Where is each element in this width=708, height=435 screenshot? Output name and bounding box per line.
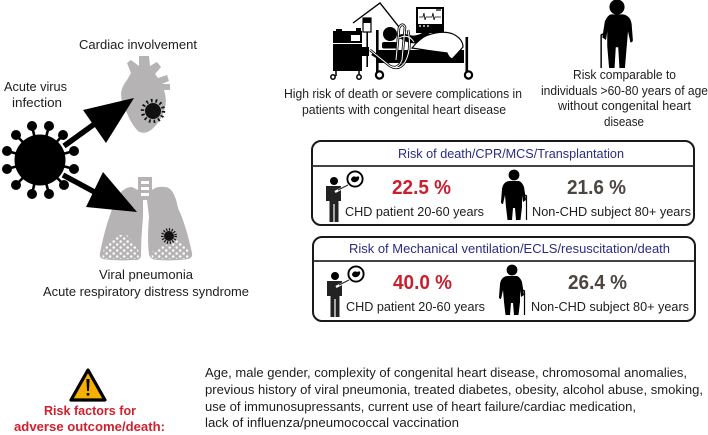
panel: risk of death [312, 141, 694, 225]
text: risk comparable statement: Risk comparable to [573, 68, 676, 82]
heading: risk of mechanical ventilation: Risk of Mechanical ventilation/ECLS/resuscitation/death [349, 241, 670, 256]
heading: risk factors: adverse outcome/death: [14, 419, 165, 434]
bed frame [376, 30, 379, 72]
value: 40.0 percent: 40.0 % [393, 272, 452, 294]
text: high risk statement: High risk of death or severe complications in [284, 87, 522, 101]
panel: risk of mechanical ventilation [313, 237, 695, 321]
text: risk comparable statement: without congenital heart [557, 99, 692, 113]
value: 21.6 percent: 21.6 % [567, 177, 626, 199]
icon: virus [2, 121, 79, 199]
heading: risk of death: Risk of death/CPR/MCS/Transplantation [398, 146, 624, 161]
icon: CHD patient [326, 171, 363, 222]
icon: IV bag and pole [363, 18, 371, 67]
text: risk comparable statement: disease [604, 115, 644, 129]
label: cardiac involvement: Cardiac involvement [79, 38, 198, 52]
icon: warning triangle [71, 370, 105, 400]
label: viral pneumonia and ARDS [43, 268, 249, 299]
label: acute virus infection: infection [12, 96, 62, 110]
icon: ventilator machine [331, 28, 369, 79]
icon: elderly subject [499, 265, 524, 315]
text: risk factor list: lack of influenza/pneumococcal vaccination [205, 416, 459, 430]
heading: risk factors: Risk factors for [44, 403, 136, 418]
icon: patient in hospital bed [331, 3, 472, 79]
label: acute virus infection [4, 80, 67, 110]
text: risk factor list [205, 366, 703, 430]
label: viral pneumonia and ARDS: Acute respiratory distress syndrome [43, 285, 249, 299]
value: 26.4 percent: 26.4 % [568, 272, 627, 294]
value: 22.5 percent: 22.5 % [392, 177, 451, 199]
label: non-CHD subject: Non-CHD subject 80+ years [531, 300, 689, 314]
patient [383, 27, 397, 41]
arrow: virus to heart [64, 98, 134, 146]
text: risk comparable statement [541, 68, 708, 129]
tubes [370, 25, 414, 68]
text: high risk statement: patients with congenital heart disease [302, 103, 506, 117]
arrow: virus to lungs [63, 172, 137, 212]
icon: monitor [416, 7, 444, 33]
label: CHD patient: CHD patient 20-60 years [345, 205, 484, 219]
icon: lungs with virus [100, 177, 192, 260]
icon: CHD patient [327, 266, 364, 317]
label: CHD patient: CHD patient 20-60 years [346, 300, 485, 314]
text: risk factor list: previous history of viral pneumonia, treated diabetes, obesity, alcohol abuse, smoking, [205, 383, 703, 397]
icon: heart with virus [121, 56, 170, 133]
heading: risk factors [14, 403, 165, 434]
text: high risk statement [284, 87, 522, 117]
label: viral pneumonia and ARDS: Viral pneumonia [99, 268, 193, 282]
icon: elderly subject [501, 170, 526, 220]
label: acute virus infection: Acute virus [4, 80, 67, 94]
text: risk factor list: Age, male gender, complexity of congenital heart disease, chromosomal anomalies, [205, 366, 687, 380]
text: risk factor list: use of immunosupressants, current use of heart failure/cardiac medication, [205, 400, 636, 414]
icon: elderly person [601, 0, 633, 68]
label: non-CHD subject: Non-CHD subject 80+ years [532, 205, 691, 219]
